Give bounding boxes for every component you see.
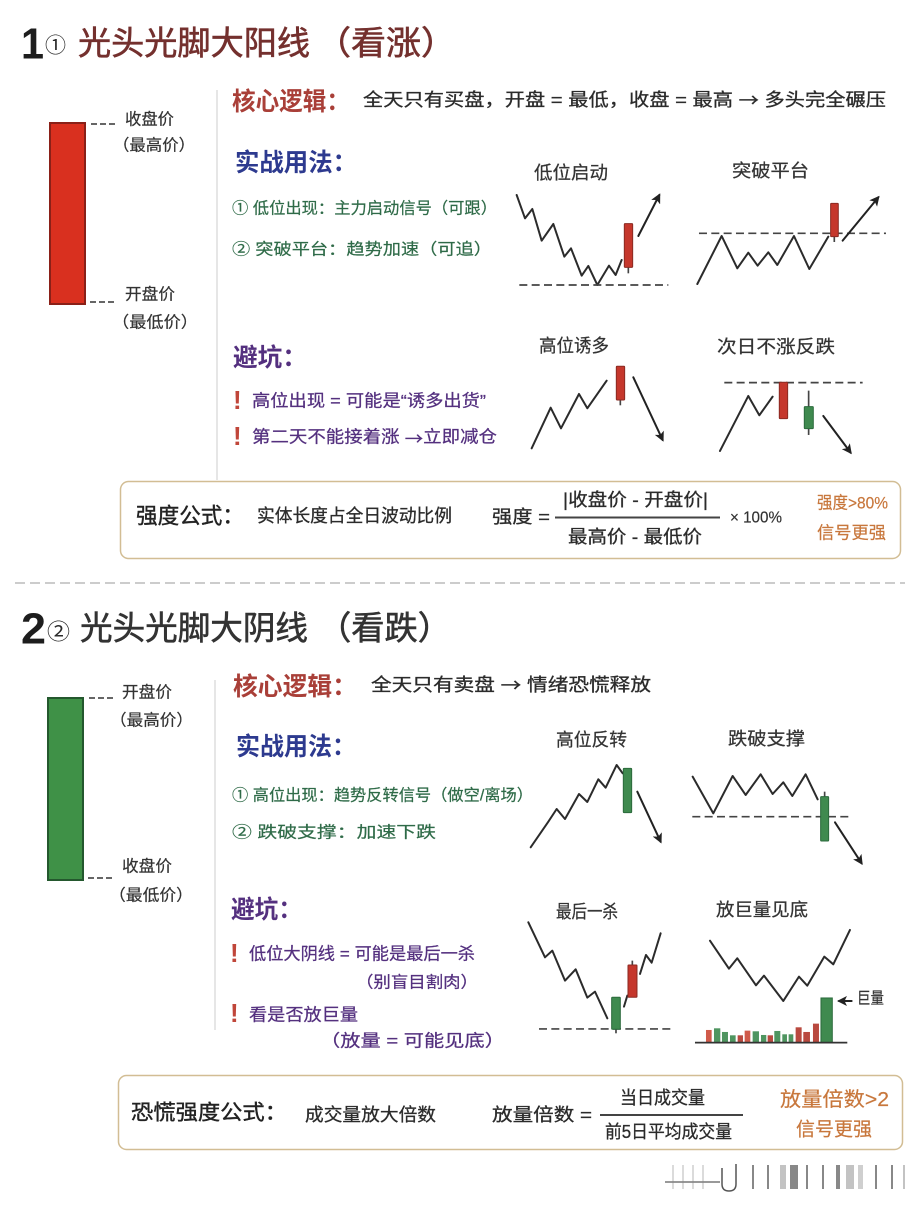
green candle diagram: 开盘价 (122, 682, 172, 702)
pitfalls: 避坑： (233, 343, 307, 372)
chart: support break (692, 729, 862, 863)
chart: low position start (517, 163, 668, 285)
formula box: strength: 最高价 - 最低价 (568, 527, 702, 547)
green candle diagram (48, 682, 193, 904)
core logic: 全天只有卖盘 → 情绪恐慌释放 (371, 672, 651, 698)
chart: high position bull trap (532, 336, 663, 448)
red candle diagram: 收盘价 (125, 110, 174, 128)
formula box: strength (120, 482, 900, 558)
chart: high position bull trap: 高位诱多 (539, 336, 609, 356)
pitfalls: ! (230, 938, 239, 968)
formula box: panic strength: 恐慌强度公式： (131, 1102, 287, 1124)
title: section 1: 光头光脚大阳线 (78, 24, 310, 62)
chart: platform breakout: 突破平台 (732, 161, 809, 181)
section 2: bearish candle (21, 604, 902, 1150)
core logic: 全天只有买盘，开盘 = 最低，收盘 = 最高 → 多头完全碾压 (363, 87, 886, 113)
green candle diagram: 收盘价 (122, 856, 172, 876)
pitfalls: （别盲目割肉） (356, 974, 478, 992)
pitfalls: ! (230, 998, 239, 1028)
red candle diagram: 开盘价 (125, 284, 175, 304)
red candle diagram: （最低价） (112, 314, 198, 332)
pitfalls: 低位大阴线 = 可能是最后一杀 (249, 944, 475, 964)
pitfalls (230, 895, 505, 1050)
core logic (233, 672, 651, 701)
chart: final plunge: 最后一杀 (556, 902, 618, 922)
chart: platform breakout (697, 161, 886, 284)
formula box: strength: × 100% (730, 510, 782, 526)
title: section 1: （看涨） (316, 24, 456, 62)
chart: final plunge (528, 902, 671, 1033)
usage: ② 跌破支撑：加速下跌 (232, 824, 436, 842)
formula box: panic strength: 放量倍数>2 (780, 1088, 889, 1111)
title: section 1: 1 (21, 20, 44, 68)
title: section 2: ② (47, 620, 70, 644)
green candle diagram: （最低价） (109, 886, 193, 904)
formula box: panic strength (118, 1076, 902, 1150)
green candle diagram: （最高价） (110, 712, 193, 730)
red candle diagram (50, 110, 198, 332)
red candle diagram: （最高价） (113, 136, 195, 154)
title: section 1 (21, 20, 456, 68)
formula box: strength: 强度 = (492, 507, 550, 527)
usage: ② 突破平台：趋势加速（可追） (232, 240, 492, 258)
core logic: 核心逻辑： (233, 673, 357, 701)
core logic: 核心逻辑： (232, 88, 350, 116)
pitfalls: ! (233, 385, 242, 415)
chart: high reversal: 高位反转 (556, 730, 627, 750)
formula box: strength: 信号更强 (817, 524, 886, 542)
pitfalls: ! (233, 421, 242, 451)
title: section 2 (21, 604, 451, 654)
title: section 2: 2 (21, 604, 46, 654)
pitfalls: 高位出现 = 可能是“诱多出货” (252, 392, 486, 410)
watermark artifact (665, 1164, 905, 1191)
chart: huge volume bottom: 放巨量见底 (716, 900, 808, 920)
usage (232, 733, 533, 842)
chart: support break: 跌破支撑 (728, 729, 805, 749)
pitfalls: 避坑： (231, 895, 302, 924)
usage: ① 高位出现：趋势反转信号（做空/离场） (232, 786, 533, 804)
chart: huge volume bottom: 巨量 (857, 990, 884, 1008)
usage: 实战用法： (236, 733, 356, 761)
pitfalls: （放量 = 可能见底） (320, 1032, 505, 1050)
chart: next day falls (717, 337, 863, 453)
formula box: panic strength: 前5日平均成交量 (605, 1122, 732, 1142)
title: section 2: （看跌） (318, 610, 451, 646)
pitfalls: 第二天不能接着涨 →立即减仓 (252, 424, 497, 450)
formula box: strength: 强度>80% (817, 494, 888, 512)
pitfalls (233, 343, 497, 451)
formula box: strength: |收盘价 - 开盘价| (563, 490, 708, 510)
formula box: panic strength: 放量倍数 = (492, 1105, 592, 1125)
core logic (232, 87, 886, 116)
formula box: strength: 强度公式： (136, 504, 244, 528)
formula box: panic strength: 信号更强 (796, 1118, 872, 1140)
usage: 实战用法： (235, 149, 357, 177)
pitfalls: 看是否放巨量 (249, 1006, 358, 1024)
title: section 2: 光头光脚大阴线 (80, 610, 308, 646)
usage (232, 149, 497, 258)
formula box: panic strength: 成交量放大倍数 (305, 1105, 436, 1125)
chart: next day falls: 次日不涨反跌 (717, 337, 835, 357)
formula box: panic strength: 当日成交量 (620, 1088, 705, 1108)
section 1: bullish candle (21, 20, 900, 558)
chart: huge volume bottom (695, 900, 884, 1043)
title: section 1: ① (45, 34, 66, 58)
chart: low position start: 低位启动 (534, 163, 608, 183)
chart: high reversal (531, 730, 661, 847)
formula box: strength: 实体长度占全日波动比例 (257, 506, 452, 526)
usage: ① 低位出现：主力启动信号（可跟） (232, 200, 497, 218)
